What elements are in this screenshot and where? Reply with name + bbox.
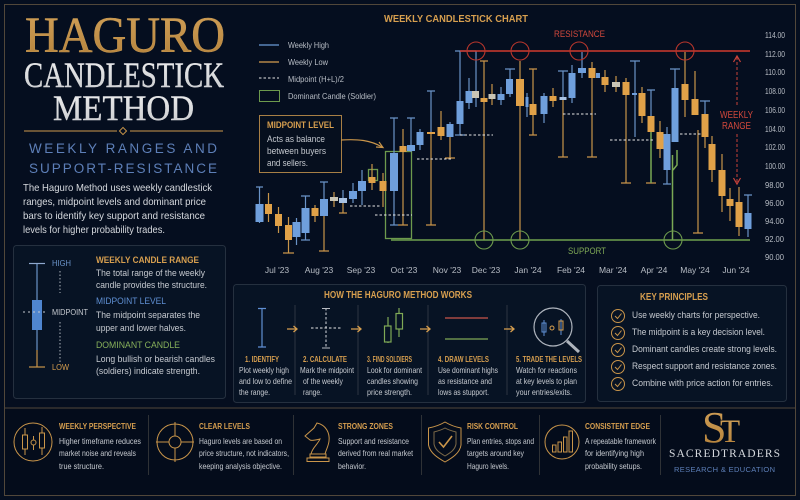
time axis: Jan '24 (514, 265, 542, 275)
time axis: Aug '23 (305, 265, 334, 275)
logo: SacredTraders: S (702, 403, 726, 452)
chart legend (259, 40, 376, 102)
legend text: dominant candle: DOMINANT CANDLE (96, 340, 180, 350)
midpoint dashes (350, 114, 701, 215)
step 5: trade the levels: 5. TRADE THE LEVELS (516, 355, 582, 364)
intro text: The Haguro Method uses weekly candlestick (23, 182, 213, 194)
chart legend: Weekly Low (288, 57, 329, 67)
time axis: Apr '24 (641, 265, 668, 275)
panel: key principles (598, 286, 786, 402)
benefit: consistent edge: for identifying high (585, 448, 644, 458)
legend text: midpoint level: upper and lower halves. (96, 323, 186, 334)
step 1: identify: 1. IDENTIFY (245, 355, 279, 364)
benefit: risk control (428, 422, 534, 471)
heading: HOW THE HAGURO METHOD WORKS (324, 290, 472, 301)
benefit: risk control: targets around key (467, 448, 525, 458)
principles list: Use weekly charts for perspective. (632, 310, 760, 320)
resistance line: RESISTANCE (554, 29, 605, 40)
step 1: identify: Plot weekly high (239, 365, 289, 375)
title: Method: METHOD (53, 88, 194, 128)
step 5: trade the levels: at key levels to plan (516, 376, 577, 386)
price axis: 110.00 (765, 67, 785, 77)
price axis: 92.00 (765, 234, 784, 244)
dominant candle boxes (368, 152, 412, 238)
benefit: strong zones: STRONG ZONES (338, 422, 394, 431)
chart: weekly candlesticks (256, 29, 785, 275)
weekly range arrow: WEEKLY (720, 110, 753, 121)
icon: magnifier (534, 308, 579, 352)
arrow: callout to midpoint (341, 140, 383, 148)
logo: SacredTraders: RESEARCH & EDUCATION (674, 465, 775, 474)
principles list: Combine with price action for entries. (632, 378, 773, 388)
step 4: draw levels: Use dominant highs (438, 365, 498, 375)
candle bodies (256, 68, 752, 237)
price axis: 106.00 (765, 105, 785, 115)
time axis: Nov '23 (433, 265, 462, 275)
icon: rising bars (545, 425, 579, 459)
legend text: weekly candle range: The total range of the weekly (96, 268, 205, 279)
legend text: weekly candle range (96, 255, 207, 291)
benefit: clear levels: price structure, not indicators, (199, 448, 289, 458)
price axis: 104.00 (765, 124, 785, 134)
subtitle: WEEKLY RANGES AND (29, 141, 217, 156)
logo: SacredTraders: T (720, 414, 740, 450)
support line (391, 231, 750, 257)
callout: midpoint level: Acts as balance (267, 134, 325, 145)
title divider (24, 127, 223, 135)
intro text (23, 182, 213, 236)
benefit: clear levels: keeping analysis objective. (199, 461, 282, 471)
icon: candles in circle (14, 423, 52, 461)
principles list: Respect support and resistance zones. (632, 361, 777, 371)
benefit: strong zones: Support and resistance (338, 436, 409, 446)
benefit: consistent edge: A repeatable framework (585, 436, 657, 446)
step 1: identify (239, 308, 292, 397)
step 3: find soldiers: 3. FIND SOLDIERS (367, 355, 412, 364)
price axis: 90.00 (765, 252, 784, 262)
icon: shield with check (428, 422, 461, 462)
legend text: midpoint level: The midpoint separates the (96, 310, 200, 321)
step 3: find soldiers (367, 308, 423, 397)
step 4: draw levels: as resistance and (438, 376, 492, 386)
price axis: 102.00 (765, 142, 785, 152)
icon: chess knight (305, 423, 329, 462)
benefit: strong zones (305, 422, 414, 471)
chart heading: WEEKLY CANDLESTICK CHART (384, 14, 528, 25)
benefit: weekly perspective: Higher timeframe reduces (59, 436, 141, 446)
step 3: find soldiers: price strength. (367, 387, 412, 397)
step 2: calculate: of the weekly (303, 376, 344, 386)
title block (23, 8, 225, 236)
time axis: Jun '24 (722, 265, 750, 275)
callout: midpoint level: and sellers. (267, 158, 308, 169)
step 1: identify: the range. (239, 387, 270, 397)
weekly range arrow (720, 56, 753, 184)
logo: SacredTraders: SACREDTRADERS (669, 448, 780, 460)
check icons (612, 310, 624, 390)
chart legend: Weekly High (288, 40, 329, 50)
benefit: consistent edge: probability setups. (585, 461, 642, 471)
candle anatomy diagram: LOW (52, 362, 69, 372)
legend text: midpoint level (96, 296, 200, 334)
benefit: risk control: RISK CONTROL (467, 422, 518, 431)
candle anatomy diagram (23, 258, 88, 372)
time axis: Dec '23 (472, 265, 501, 275)
benefit: clear levels: CLEAR LEVELS (199, 422, 251, 431)
time axis: Sep '23 (347, 265, 376, 275)
step 4: draw levels: 4. DRAW LEVELS (438, 355, 489, 364)
intro text: levels for higher probability trades. (23, 224, 165, 236)
step 2: calculate: 2. CALCULATE (303, 355, 348, 364)
price axis: 94.00 (765, 216, 784, 226)
benefit: weekly perspective: WEEKLY PERSPECTIVE (59, 422, 137, 431)
callout: midpoint level (260, 116, 342, 172)
legend text: dominant candle: (soldiers) indicate strength. (96, 366, 200, 377)
icon: target (156, 422, 194, 462)
heading: KEY PRINCIPLES (640, 292, 708, 303)
candle anatomy diagram: HIGH (52, 258, 71, 268)
legend text: weekly candle range: candle provides the structure. (96, 280, 207, 291)
principles list: The midpoint is a key decision level. (632, 327, 765, 337)
arrows between steps (287, 326, 514, 332)
support line: SUPPORT (568, 246, 606, 257)
title: Candlestick: CANDLESTICK (24, 55, 224, 95)
benefit: strong zones: derived from real market (338, 448, 414, 458)
benefit: strong zones: behavior. (338, 461, 366, 471)
time axis: Feb '24 (557, 265, 585, 275)
step 5: trade the levels: Watch for reactions (516, 365, 577, 375)
callout: midpoint level: between buyers (267, 146, 326, 157)
chart legend: Dominant Candle (Soldier) (288, 91, 376, 101)
price axis: 112.00 (765, 49, 785, 59)
principles list: Dominant candles create strong levels. (632, 344, 777, 354)
legend text: weekly candle range: WEEKLY CANDLE RANGE (96, 255, 199, 265)
time axis: May '24 (680, 265, 710, 275)
price axis: 96.00 (765, 198, 784, 208)
benefit: risk control: Plan entries, stops and (467, 436, 534, 446)
weekly range arrow: RANGE (722, 121, 751, 132)
legend text: dominant candle (96, 340, 215, 377)
time axis (265, 265, 750, 275)
step 2: calculate: Mark the midpoint (300, 365, 355, 375)
price axis (765, 30, 785, 262)
step 4: draw levels (438, 318, 498, 397)
benefit: consistent edge: CONSISTENT EDGE (585, 422, 651, 431)
price axis: 108.00 (765, 86, 785, 96)
benefit: clear levels: Haguro levels are based on (199, 436, 282, 446)
panel: candle legend (14, 246, 226, 398)
benefit: weekly perspective (14, 422, 141, 471)
title: Haguro: HAGURO (25, 8, 225, 64)
principles list (632, 310, 777, 388)
benefit: clear levels (156, 422, 289, 471)
candle anatomy diagram: MIDPOINT (52, 307, 88, 317)
benefit: weekly perspective: true structure. (59, 461, 104, 471)
wicks (256, 51, 752, 253)
step 2: calculate (300, 308, 355, 397)
price axis: 114.00 (765, 30, 785, 40)
chart legend: Midpoint (H+L)/2 (288, 74, 344, 84)
panel: how the method works (234, 284, 586, 402)
step 3: find soldiers: candles showing (367, 376, 418, 386)
step 2: calculate: range. (303, 387, 322, 397)
step 4: draw levels: lows as stupport. (438, 387, 489, 397)
callout: midpoint level: MIDPOINT LEVEL (267, 120, 334, 130)
step 1: identify: and low to define (239, 376, 292, 386)
time axis: Mar '24 (599, 265, 627, 275)
legend text: midpoint level: MIDPOINT LEVEL (96, 296, 166, 306)
subtitle line two: SUPPORT-RESISTANCE (29, 161, 217, 176)
step 5: trade the levels (516, 308, 582, 397)
intro text: ranges, midpoint levels and dominant price (23, 196, 206, 208)
step 3: find soldiers: Look for dominant (367, 365, 423, 375)
time axis: Oct '23 (391, 265, 418, 275)
legend text: dominant candle: Long bullish or bearish candles (96, 354, 215, 365)
price axis: 98.00 (765, 180, 784, 190)
intro text: bars to identify key support and resistance (23, 210, 205, 222)
benefit: weekly perspective: market noise and reveals (59, 448, 136, 458)
price axis: 100.00 (765, 161, 785, 171)
step 5: trade the levels: your entries/exits. (516, 387, 572, 397)
benefit: risk control: Haguro levels. (467, 461, 509, 471)
resistance line (460, 29, 750, 60)
time axis: Jul '23 (265, 265, 289, 275)
logo: SacredTraders (669, 403, 780, 474)
benefit: consistent edge (545, 422, 657, 471)
